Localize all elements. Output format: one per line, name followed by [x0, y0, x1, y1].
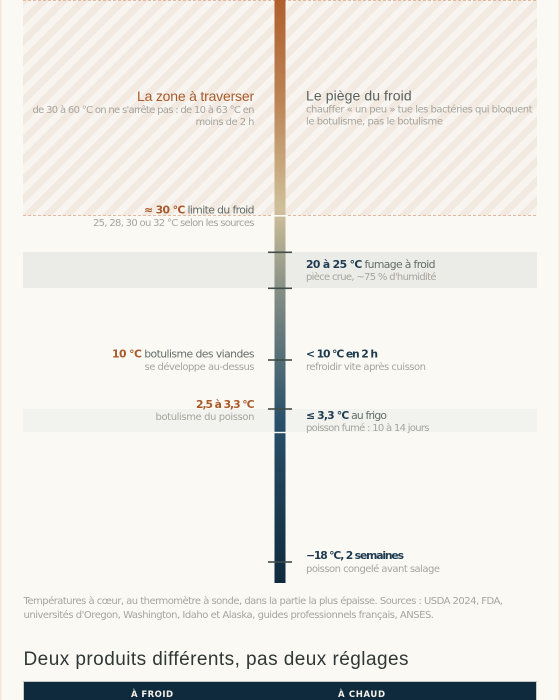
- panel: fridge band: [23, 409, 537, 432]
- label: cold smoking: pièce crue, ~75 % d'humidité: [306, 271, 436, 283]
- label: zone to cross: de 30 à 60 °C on ne s'arrête pas : de 10 à 63 °C en: [32, 104, 254, 116]
- label: meat botulism: [112, 348, 255, 373]
- comparison table header: [24, 682, 536, 700]
- section heading: Deux produits différents, pas deux réglages: [24, 649, 408, 670]
- label: fridge: ≤ 3,3 °C au frigo: [306, 409, 387, 422]
- label: zone to cross: La zone à traverser: [137, 88, 254, 104]
- column heading: cold: À FROID: [131, 688, 173, 700]
- label: fish botulism: 2,5 à 3,3 °C: [196, 398, 255, 411]
- label: frozen fish: [306, 549, 440, 575]
- label: cool in two hours: [306, 348, 426, 373]
- label: cold trap: Le piège du froid: [306, 88, 412, 104]
- label: fridge: [306, 409, 430, 434]
- label: 30 °C limit: 25, 28, 30 ou 32 °C selon les sources: [93, 218, 254, 229]
- source note: Températures à cœur, au thermomètre à sonde, dans la partie la plus épaisse. Sources : USDA 2024, FDA,: [22, 595, 503, 607]
- label: cold trap: chauffer « un peu » tue les bactéries qui bloquent: [306, 104, 533, 116]
- label: frozen fish: poisson congelé avant salage: [306, 563, 440, 575]
- panel: danger zone band: [23, 0, 537, 216]
- label: zone to cross: [32, 88, 254, 128]
- label: zone to cross: moins de 2 h: [196, 117, 254, 128]
- label: fish botulism: [156, 398, 255, 423]
- panel: cold smoking band: [23, 252, 537, 288]
- label: 30 °C limit: ≈ 30 °C limite du froid: [144, 204, 254, 216]
- label: cold smoking: 20 à 25 °C fumage à froid: [306, 258, 436, 271]
- label: meat botulism: 10 °C botulisme des viandes: [112, 348, 255, 360]
- label: cold trap: le botulisme, pas le botulisme: [306, 117, 443, 128]
- source note: universités d'Oregon, Washington, Idaho et Alaska, guides professionnels français, ANSES.: [24, 609, 434, 621]
- source note: [22, 595, 503, 621]
- label: cold trap: [306, 88, 533, 128]
- label: 30 °C limit: [93, 204, 254, 229]
- label: cool in two hours: < 10 °C en 2 h: [306, 348, 378, 360]
- label: frozen fish: −18 °C, 2 semaines: [306, 549, 404, 562]
- column heading: hot: À CHAUD: [338, 688, 385, 700]
- label: fish botulism: botulisme du poisson: [156, 412, 254, 423]
- label: cool in two hours: refroidir vite après cuisson: [306, 361, 426, 373]
- temperature scale bar: [268, 0, 292, 583]
- label: cold smoking: [306, 258, 436, 283]
- label: fridge: poisson fumé : 10 à 14 jours: [306, 422, 430, 434]
- label: meat botulism: se développe au-dessus: [144, 361, 254, 373]
